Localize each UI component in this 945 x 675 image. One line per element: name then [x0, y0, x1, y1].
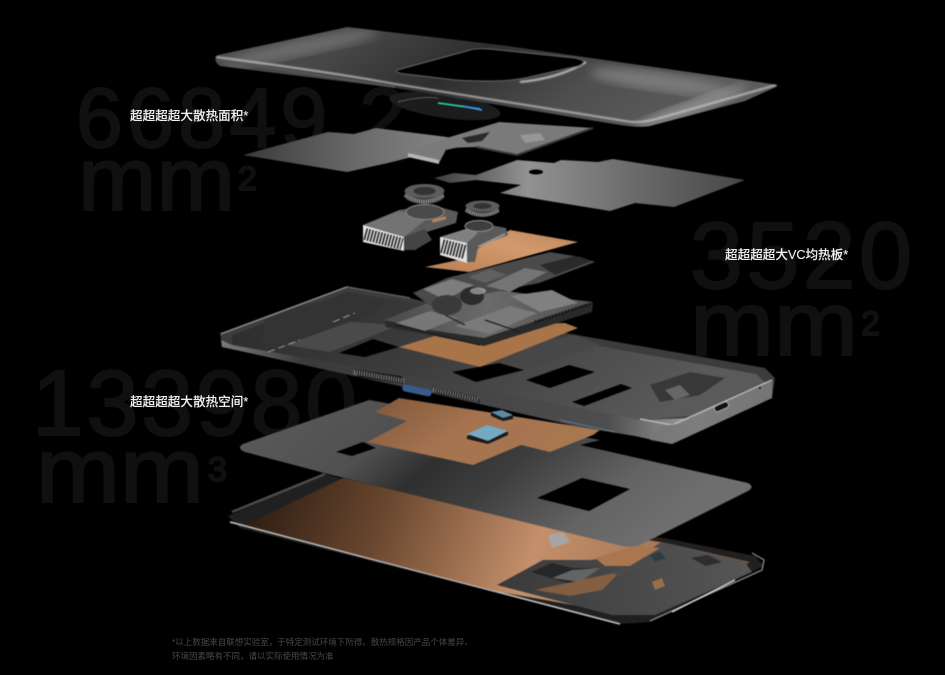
camera opening [396, 49, 583, 81]
icon: blower wheel left [404, 184, 444, 204]
background number: 66849.2 mm² [76, 71, 406, 230]
fan and heat sink right [440, 220, 508, 263]
copper sheet under the frame [367, 398, 600, 465]
USB-C port [713, 401, 730, 413]
copper sheet top [425, 230, 578, 272]
screen plate with copper sheet [228, 474, 764, 624]
background number: 133980 mm³: 3 [208, 451, 227, 489]
fan and heat sink left [363, 204, 458, 251]
background number: 3520 mm²: mm [690, 274, 858, 375]
footnote: *以上数据来自联想实验室，于特定测试环境下所得。散热规格因产品个体差异、 [172, 637, 473, 647]
blue port [401, 384, 432, 397]
small sensor chip [491, 410, 513, 421]
graphite sheet left [243, 128, 470, 172]
back cover [215, 24, 778, 135]
background number: 66849.2 mm²: 2 [238, 160, 257, 198]
label: VC vapor chamber: 超超超超大VC均热板* [725, 247, 848, 262]
footnote [172, 637, 473, 661]
blue thermal chip [467, 425, 508, 444]
upper circuit board [413, 252, 595, 315]
metal bracket [408, 122, 593, 164]
main circuit board [384, 288, 593, 346]
footnote: 环境因素略有不同，请以实际使用情况为准 [172, 651, 334, 661]
copper sheet above frame [399, 323, 578, 367]
background number: 3520 mm²: 2 [861, 305, 880, 343]
large graphite sheet [240, 400, 752, 547]
speaker grille right [432, 386, 480, 403]
label: heat dissipation area: 超超超超大散热面积* [130, 108, 248, 123]
background number: 66849.2 mm²: 66849.2 [76, 71, 406, 165]
background number: 133980 mm³ [32, 351, 357, 522]
cooling fan with RGB light [388, 86, 502, 126]
graphite sheet right [434, 159, 745, 211]
speaker grille left [354, 369, 404, 384]
icon: blower wheel right [466, 200, 500, 216]
background number: 133980 mm³: mm [36, 420, 204, 522]
label: heat dissipation space: 超超超超大散热空间* [130, 394, 248, 409]
background number: 133980 mm³: 133980 [32, 351, 357, 455]
background number: 66849.2 mm²: mm [78, 130, 235, 230]
background number: 3520 mm²: 3520 [690, 203, 912, 309]
background number: 3520 mm² [690, 203, 912, 375]
camera module [432, 287, 486, 315]
middle frame [220, 286, 775, 444]
